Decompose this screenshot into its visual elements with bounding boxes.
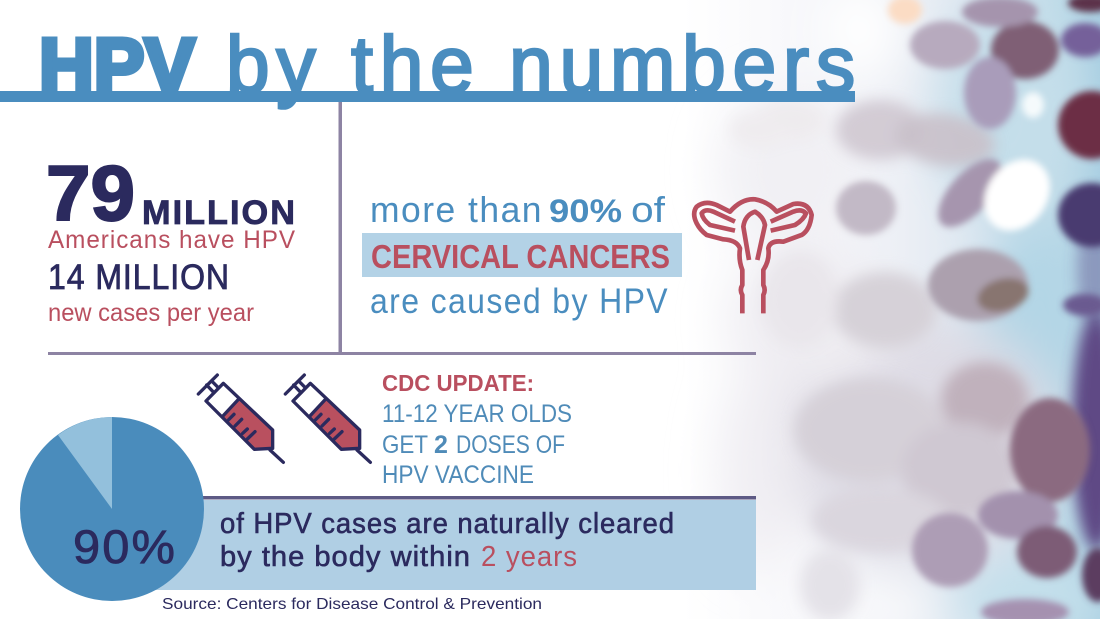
vertical divider: [338, 102, 342, 354]
icon: syringe 2: [285, 375, 370, 462]
stat: 79 million: MILLION: [142, 194, 297, 232]
CDC update: [382, 370, 572, 489]
icon: syringe 1: [198, 375, 283, 462]
title: by the numbers: [226, 20, 862, 109]
cervical cancer statement: more than: [370, 189, 543, 230]
stat: 79 million: [46, 149, 297, 327]
icon: uterus: [694, 199, 812, 313]
cervical cancer statement: of: [631, 189, 666, 230]
cervical cancer statement: CERVICAL CANCERS: [371, 238, 670, 275]
stat: 79 million: 79: [46, 149, 135, 237]
cervical cancer statement: [362, 189, 682, 321]
stat: 79 million: 14 MILLION: [48, 258, 230, 297]
cervical cancer statement: are caused by HPV: [370, 282, 669, 321]
pie chart: 90%: [20, 417, 204, 601]
CDC update: GET: [382, 431, 428, 459]
CDC update: HPV VACCINE: [382, 461, 534, 489]
panel: cleared band: [150, 496, 756, 590]
horizontal divider: [48, 352, 756, 355]
cervical cancer statement: 90%: [549, 193, 622, 229]
source: Source: Centers for Disease Control & Prevention: [162, 596, 542, 613]
cleared statement: by the body within: [220, 541, 471, 573]
stat: 79 million: Americans have HPV: [48, 226, 296, 254]
pie chart: 90%: 90%: [73, 520, 177, 573]
cleared statement: [220, 508, 675, 573]
cleared statement: of HPV cases are naturally cleared: [220, 508, 675, 540]
cleared statement: 2 years: [481, 541, 578, 573]
CDC update: CDC UPDATE:: [382, 370, 534, 396]
title: HPV: [39, 23, 195, 109]
CDC update: 11-12 YEAR OLDS: [382, 400, 572, 428]
CDC update: DOSES OF: [456, 431, 565, 459]
stat: 79 million: new cases per year: [48, 299, 254, 327]
CDC update: 2: [434, 431, 448, 459]
